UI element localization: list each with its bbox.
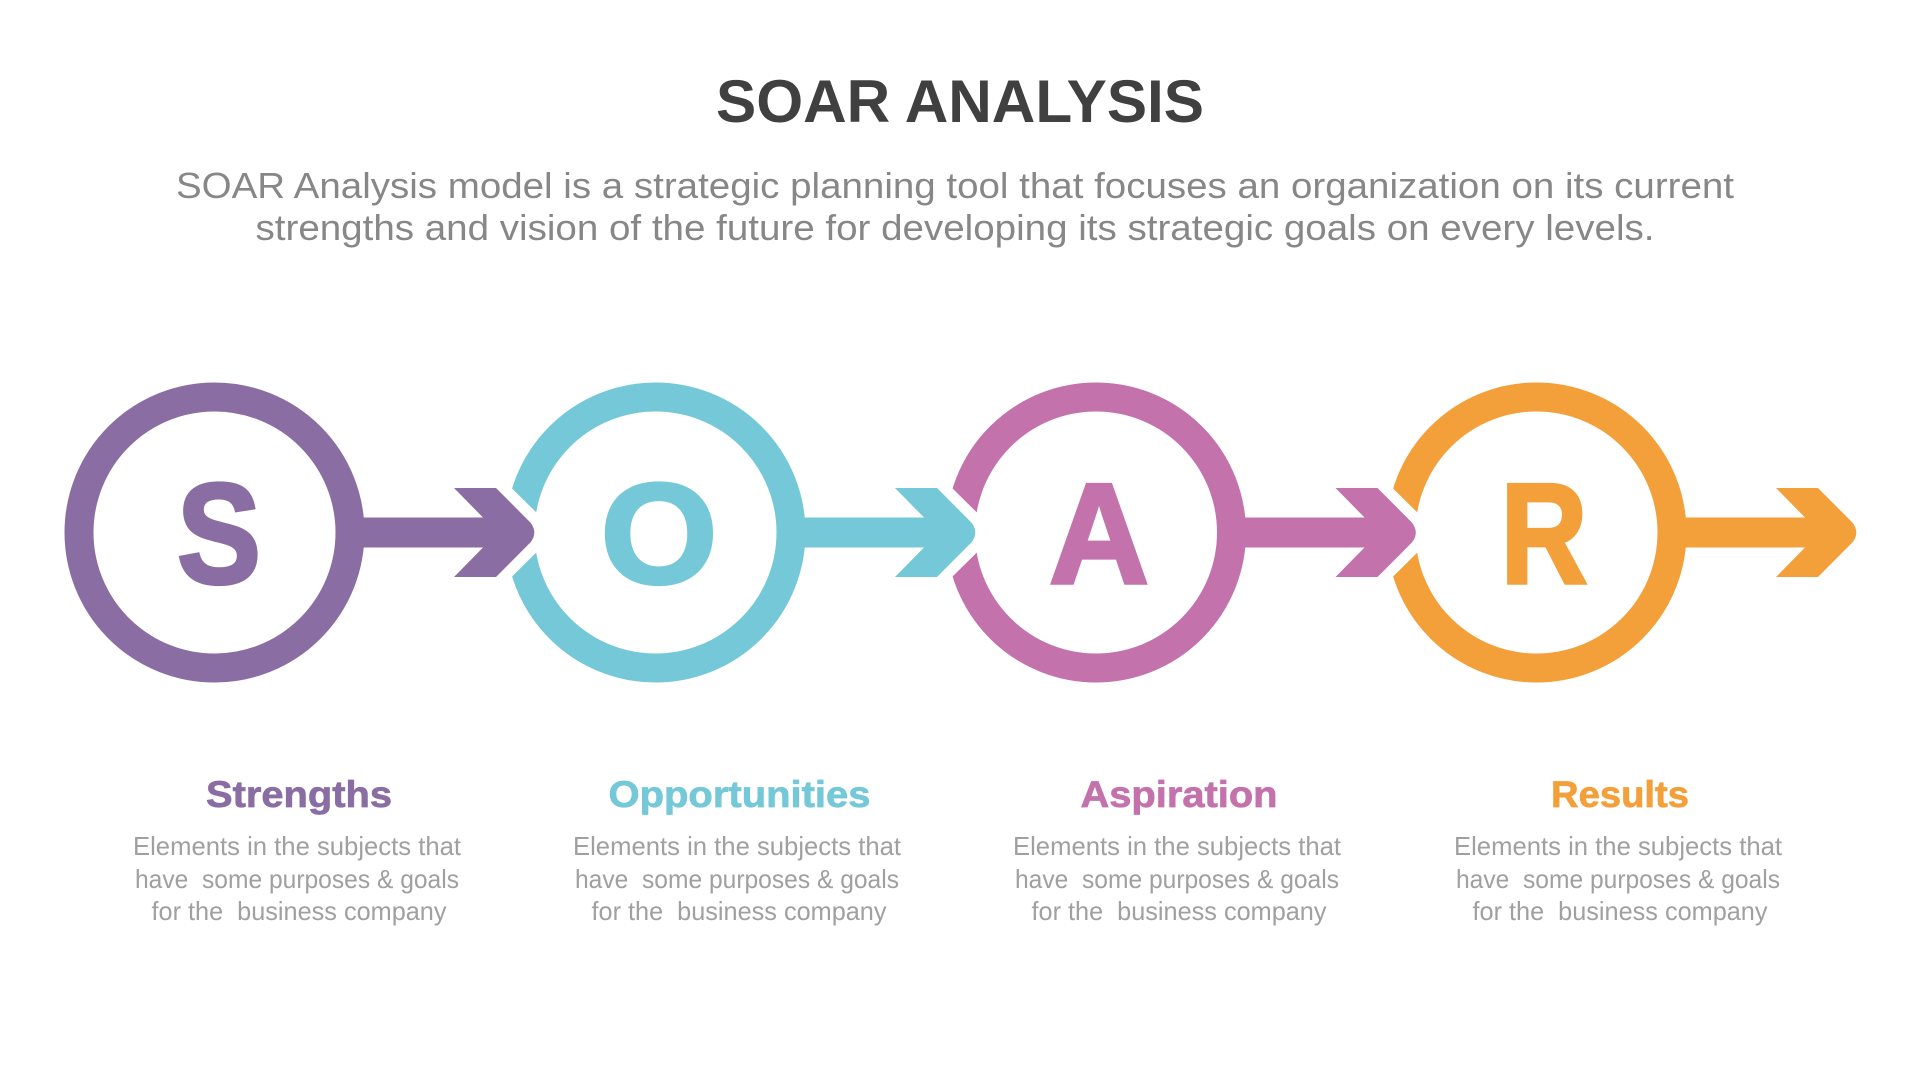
text block: strengths [133,774,462,926]
body: aspiration [1013,831,1342,926]
heading: aspiration: Aspiration [1080,774,1278,815]
circle: O opportunities: O [600,455,718,614]
body: opportunities: have some purposes & goals [575,864,899,894]
circle: R results: R [1500,455,1588,614]
body: aspiration: for the business company [1032,896,1326,926]
subtitle: SOAR Analysis model is a strategic planning tool that focuses an organization on its current [176,165,1734,206]
heading: opportunities: Opportunities [608,774,870,815]
body: strengths: for the business company [152,896,446,926]
circle: A aspiration: A [1049,455,1149,614]
arrow: pink [1236,488,1416,577]
subtitle: strengths and vision of the future for developing its strategic goals on every levels. [256,207,1654,248]
heading: results: Results [1551,774,1689,815]
circle: R results [1347,397,1672,668]
body: aspiration: Elements in the subjects that [1013,831,1342,861]
body: strengths [133,831,462,926]
text block: opportunities [573,774,902,926]
text block: aspiration [1013,774,1342,926]
body: results [1454,831,1783,926]
body: results: Elements in the subjects that [1454,831,1783,861]
body: opportunities: for the business company [592,896,886,926]
body: aspiration: have some purposes & goals [1015,864,1339,894]
body: results: have some purposes & goals [1456,864,1780,894]
body: opportunities [573,831,902,926]
circle: S strengths: S [177,455,261,614]
arrow: purple [354,488,534,577]
circle: O opportunities [466,397,791,668]
subtitle [176,165,1734,248]
arrow: cyan [795,488,975,577]
title: SOAR ANALYSIS [716,68,1204,135]
body: opportunities: Elements in the subjects that [573,831,902,861]
text block: results [1454,774,1783,926]
body: results: for the business company [1472,896,1768,926]
body: strengths: have some purposes & goals [135,864,459,894]
body: strengths: Elements in the subjects that [133,831,462,861]
circle: S strengths [79,397,350,668]
circle: A aspiration [906,397,1232,668]
arrow: orange [1676,488,1856,577]
heading: strengths: Strengths [206,774,392,815]
